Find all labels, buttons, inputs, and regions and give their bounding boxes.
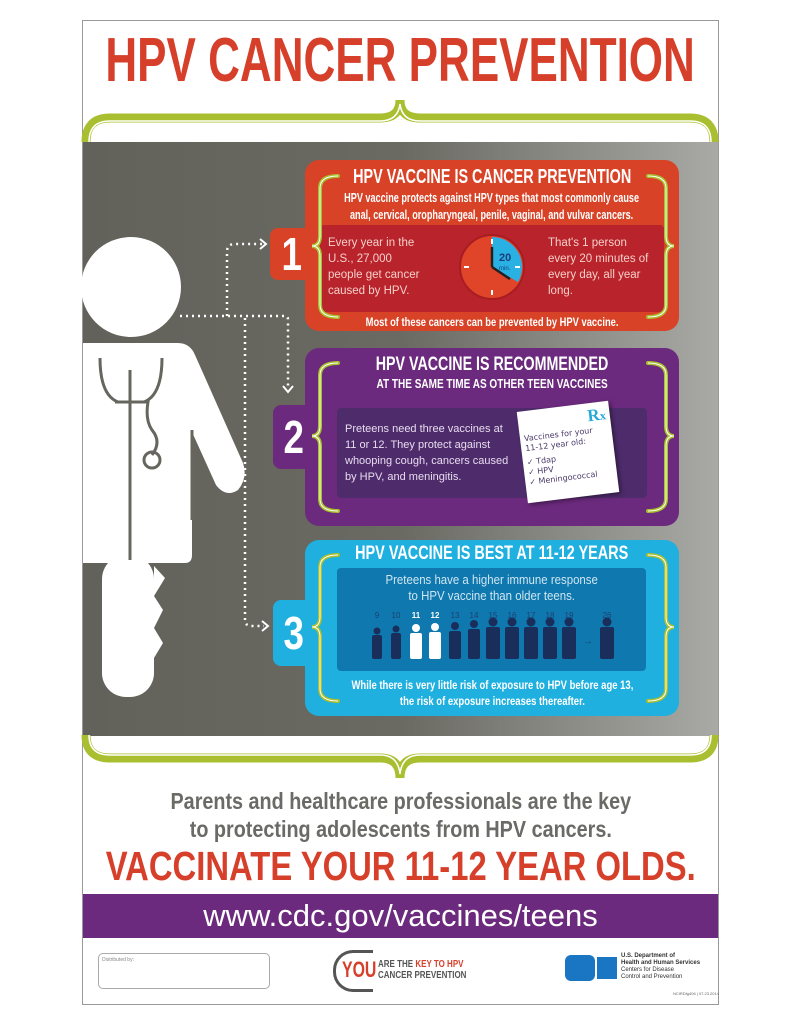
number tab 3: 3	[284, 607, 304, 659]
HHS CDC logo	[565, 952, 719, 996]
age chart box: 15	[489, 611, 498, 620]
age chart box: 19	[565, 611, 574, 620]
number tab 1: 1	[282, 228, 302, 280]
icon: prescription note: ✓ Tdap	[526, 455, 557, 467]
panel 3 footer	[351, 678, 633, 708]
number tab 2: 2	[284, 411, 304, 463]
icon: prescription note	[517, 401, 619, 503]
inner text box	[337, 408, 647, 498]
key message text: to protecting adolescents from HPV cancers.	[189, 816, 612, 842]
url band: www.cdc.gov/vaccines/teens	[203, 898, 598, 933]
key message text: Parents and healthcare professionals are the key	[170, 788, 631, 814]
icon: prescription note: ✓ HPV	[528, 465, 554, 477]
number tab 1	[270, 228, 314, 280]
age chart box: Preteens have a higher immune response	[385, 572, 598, 587]
number tab 2	[273, 405, 315, 469]
distributed by box: Distributed by:	[102, 957, 134, 963]
distributed by box	[98, 953, 270, 989]
panel 1 subtitle: HPV vaccine protects against HPV types that most commonly cause	[345, 190, 639, 205]
gray panel background	[83, 142, 718, 736]
age chart box: 17	[527, 611, 536, 620]
stat text right: That's 1 person every 20 minutes of every day, all year long.	[548, 237, 648, 297]
HHS CDC logo: Centers for Disease	[621, 967, 674, 973]
age chart box: →	[583, 636, 593, 647]
panel 1 subtitle	[344, 190, 639, 222]
icon: prescription note: Rx	[586, 405, 607, 425]
panel 1 heading: HPV VACCINE IS CANCER PREVENTION	[353, 166, 631, 188]
age chart box: 10	[392, 611, 401, 620]
panel 1: cancer prevention	[270, 160, 679, 331]
HHS CDC logo: U.S. Department of	[621, 953, 675, 959]
inner stat box	[320, 225, 664, 312]
HHS CDC logo: Health and Human Services	[621, 960, 700, 966]
stat text left: Every year in the U.S., 27,000 people get cancer caused by HPV.	[328, 237, 419, 297]
icon: clock: min.	[499, 266, 511, 272]
icon: prescription note: ✓ Meningococcal	[529, 470, 598, 487]
campaign logo	[333, 950, 466, 992]
age chart box: 13	[451, 611, 460, 620]
call to action: VACCINATE YOUR 11-12 YEAR OLDS.	[106, 843, 695, 889]
icon: prescription note: 11-12 year old:	[525, 437, 586, 453]
url band	[83, 894, 718, 938]
panel 2 heading: HPV VACCINE IS RECOMMENDED	[376, 354, 608, 375]
age chart box	[337, 568, 646, 671]
age chart box: 18	[546, 611, 555, 620]
panel 3 heading: HPV VACCINE IS BEST AT 11-12 YEARS	[355, 543, 629, 564]
panel 1 subtitle: anal, cervical, oropharyngeal, penile, vaginal, and vulvar cancers.	[350, 207, 634, 222]
age chart box: 11	[412, 611, 421, 620]
number tab 3	[273, 600, 315, 666]
age chart box: 16	[508, 611, 517, 620]
panel 1 footer: Most of these cancers can be prevented by HPV vaccine.	[366, 315, 618, 329]
age chart box: 9	[375, 611, 380, 620]
panel 2: recommended: AT THE SAME TIME AS OTHER TEEN VACCINES	[376, 376, 608, 391]
HHS CDC logo: NCIRDfg406 | 07.23.2014	[673, 991, 719, 996]
doctor figure	[81, 237, 245, 697]
panel 3: best at 11-12	[273, 540, 679, 716]
key message text	[170, 788, 631, 842]
icon: clock: 20	[499, 252, 511, 264]
icon: prescription note: Vaccines for your	[524, 426, 593, 443]
dotted connector arrows	[180, 244, 288, 626]
panel 3 footer: the risk of exposure increases thereafter.	[400, 694, 584, 708]
campaign logo: YOU	[342, 957, 376, 982]
age chart box: to HPV vaccine than older teens.	[408, 588, 575, 603]
age chart box: 26	[603, 611, 612, 620]
age chart box: 14	[470, 611, 479, 620]
icon: clock	[459, 234, 525, 300]
panel 2: recommended	[273, 348, 679, 526]
HHS CDC logo: Control and Prevention	[621, 974, 682, 980]
campaign logo: CANCER PREVENTION	[378, 970, 466, 981]
title: HPV CANCER PREVENTION	[106, 26, 695, 95]
campaign logo: ARE THE KEY TO HPV	[378, 959, 464, 970]
age chart box: 12	[431, 611, 440, 620]
panel 3 footer: While there is very little risk of exposure to HPV before age 13,	[351, 678, 633, 692]
inner text box: Preteens need three vaccines at 11 or 12. They protect against whooping cough, cancers caused by HPV, and meningitis.	[345, 423, 508, 483]
